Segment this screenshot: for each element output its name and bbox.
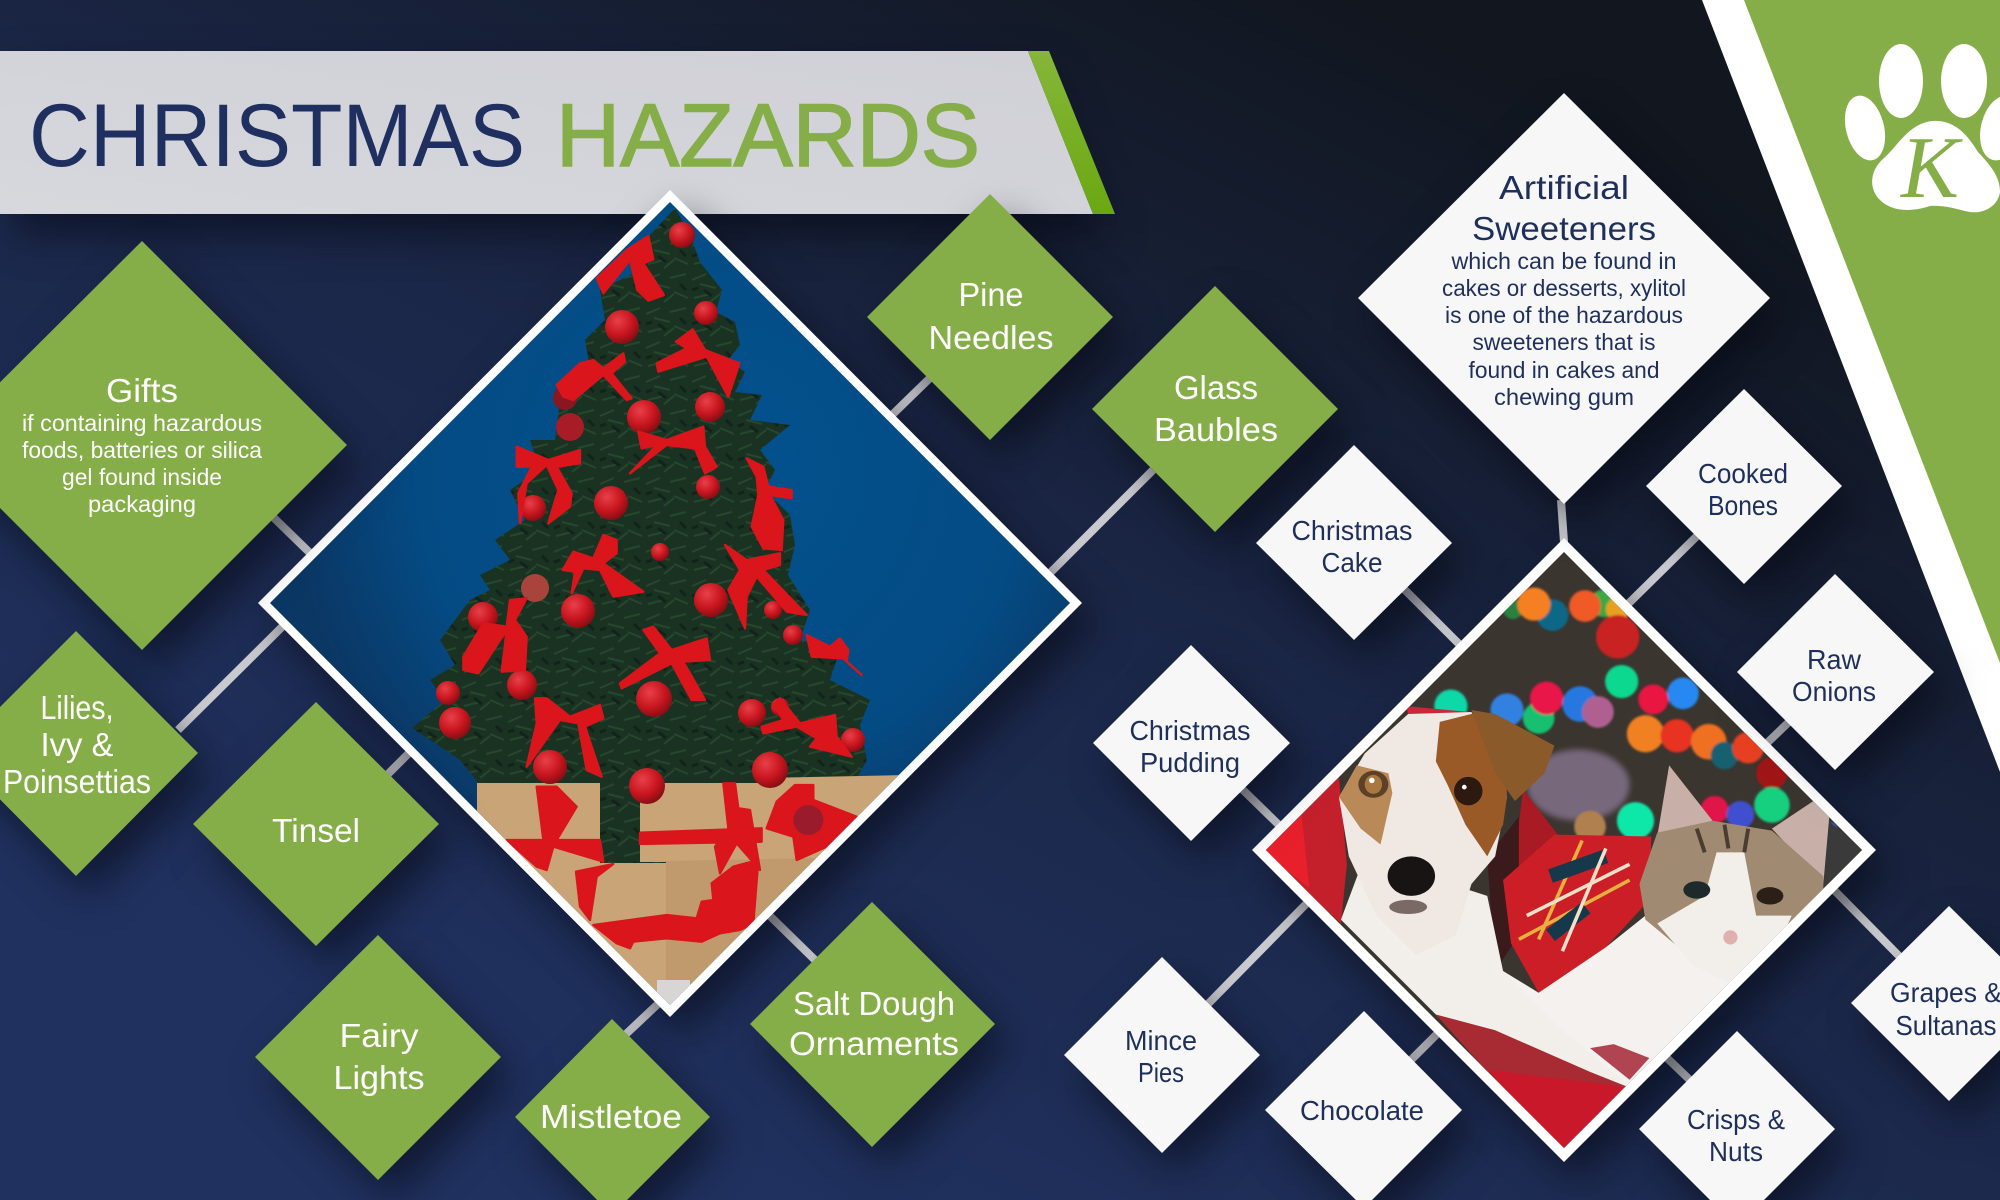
heading: Artificial Sweeteners: Artificial [1499,169,1629,206]
panel: Crisps & Nuts [1639,1031,1835,1200]
panel: Glass Baubles: Glass [1174,369,1258,406]
panel: Christmas Pudding: Pudding [1140,747,1240,778]
title banner [0,51,1115,214]
heading: Artificial Sweeteners [1472,169,1656,247]
text: Gifts description [22,410,263,517]
panel: Cooked Bones: Cooked [1698,458,1788,489]
panel: Christmas Pudding: Christmas [1130,715,1250,746]
panel: Christmas Cake: Christmas [1292,515,1412,546]
panel: Glass Baubles: Baubles [1154,411,1278,448]
text: Artificial Sweeteners description: sweeteners that is [1472,329,1656,355]
panel: Christmas Pudding [1093,645,1290,841]
blankets [1262,777,1347,924]
text: Artificial Sweeteners description: cakes or desserts, xylitol [1442,275,1686,301]
panel: Gifts [0,241,347,650]
panel: Mince Pies: Mince [1125,1025,1197,1056]
panel: Raw Onions: Onions [1792,676,1876,707]
panel: Raw Onions: Raw [1807,644,1862,675]
text: Gifts description: foods, batteries or silica [22,437,263,463]
panel: Pine Needles: Needles [928,319,1054,356]
dog head [1407,706,1469,714]
panel: Mistletoe: Mistletoe [540,1098,682,1135]
bows and gift ribbons lower tree [507,698,857,948]
logo: paw with K: K [1899,120,1963,217]
panel: Lilies, Ivy & Poinsettias: Ivy & [40,726,114,763]
panel: Fairy Lights: Lights [334,1059,424,1096]
panel: Lilies, Ivy & Poinsettias: Poinsettias [3,763,151,800]
panel: Cooked Bones: Bones [1708,490,1778,521]
panel: Artificial Sweeteners [1358,93,1770,504]
panel: Christmas Cake: Cake [1322,547,1382,578]
panel: Fairy Lights: Fairy [340,1017,419,1054]
text: Gifts description: gel found inside [62,464,222,490]
panel: Tinsel [193,702,439,946]
panel: Grapes & Sultanas [1851,906,2000,1101]
text: Artificial Sweeteners description: chewing gum [1494,384,1634,410]
pet bodies [1495,896,1823,1094]
panel: Chocolate [1265,1011,1462,1200]
text: Artificial Sweeteners description: is one of the hazardous [1445,302,1683,328]
panel: Glass Baubles [1092,286,1338,532]
panel: Lilies, Ivy & Poinsettias: Lilies, [40,689,114,726]
panel: Crisps & Nuts: Nuts [1709,1136,1763,1167]
text: Gifts description: packaging [88,491,196,517]
heading: Artificial Sweeteners: Sweeteners [1472,210,1656,247]
gifts [477,775,905,1010]
panel: Cooked Bones [1646,389,1842,584]
text: Gifts description: if containing hazardous [22,410,262,436]
cat [1657,765,1713,837]
right dark corner [1824,822,1862,888]
bokeh lights [1434,587,1837,842]
panel: Salt Dough Ornaments: Ornaments [789,1025,959,1062]
connector lines [178,377,1902,1082]
text: Artificial Sweeteners description [1442,248,1686,410]
panel: Fairy Lights [255,935,501,1180]
panel: Mince Pies [1064,957,1260,1153]
panel: Raw Onions [1737,574,1934,770]
panel: Lilies, Ivy & Poinsettias [0,631,198,876]
heading: Gifts: Gifts [106,372,178,409]
corner panel: green with white band [1702,0,2000,772]
bows upper tree [463,236,862,700]
photo panel: Christmas tree [258,190,1082,1020]
tree foliage [412,208,870,865]
panel: Mince Pies: Pies [1138,1057,1184,1088]
logo: paw with K [1839,44,2000,217]
panel: Chocolate: Chocolate [1300,1095,1424,1126]
panel: Christmas Cake [1256,445,1452,640]
title: HAZARDS [556,85,980,185]
panel: Mistletoe [515,1019,710,1200]
panel: Salt Dough Ornaments: Salt Dough [793,985,955,1022]
panel: Salt Dough Ornaments [750,902,995,1147]
panel: Pine Needles [867,194,1113,440]
balls [436,222,865,804]
photo panel: dog and cat [1250,538,1883,1173]
text: Artificial Sweeteners description: found in cakes and [1468,357,1660,383]
title: CHRISTMAS [29,85,525,185]
panel: Pine Needles: Pine [958,276,1024,313]
text: Artificial Sweeteners description: which can be found in [1451,248,1676,274]
panel: Crisps & Nuts: Crisps & [1687,1104,1785,1135]
panel: Tinsel: Tinsel [272,812,360,849]
